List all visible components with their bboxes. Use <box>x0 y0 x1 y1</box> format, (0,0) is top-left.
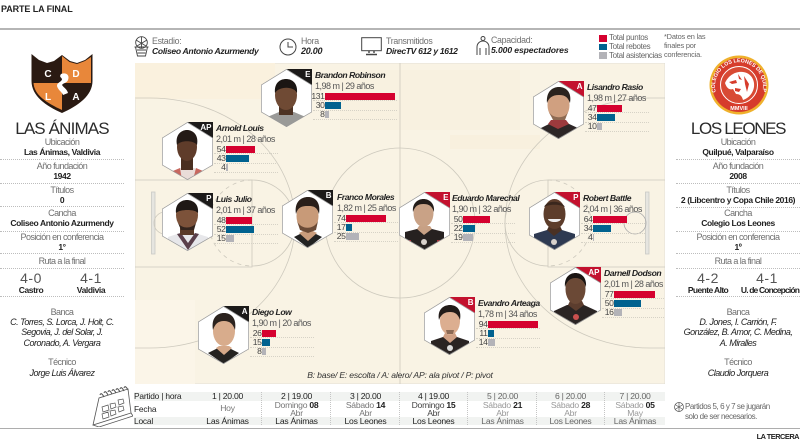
stats: 77 <box>605 288 614 298</box>
player: Eduardo Marechal: 1,90 m | 32 años <box>452 204 511 214</box>
icon: los leones crest: MMVIII <box>730 106 748 112</box>
stats: 22 <box>454 223 462 233</box>
icon: las animas shield <box>32 54 92 113</box>
note: data footnote <box>664 32 706 59</box>
playoff route: Puente Alto <box>688 285 728 295</box>
player: Lisandro Rasio: 1,98 m | 27 años <box>587 93 646 103</box>
portrait: B <box>468 298 474 307</box>
playoff route: U. de Concepción <box>741 285 799 295</box>
field: ubicacion: Las Ánimas, Valdivia <box>24 147 100 157</box>
field: titulos <box>0 185 124 207</box>
field: ubicacion: Ubicación <box>721 137 755 147</box>
note: games 5 6 7 <box>674 402 770 421</box>
stats: 15 <box>253 337 262 347</box>
stats: 25 <box>337 231 346 241</box>
stats <box>311 90 397 120</box>
stats <box>250 328 314 357</box>
stats <box>585 102 649 132</box>
schedule row labels: Fecha <box>134 404 156 414</box>
stats: 34 <box>584 223 592 233</box>
stats: 34 <box>588 112 596 122</box>
game 4 <box>400 392 468 425</box>
player: Franco Morales <box>282 190 398 248</box>
game 7 <box>614 391 656 426</box>
field: ruta a la final: Ruta a la final <box>39 256 85 266</box>
game 1 <box>194 392 262 425</box>
playoff route <box>676 270 800 297</box>
game 6: Los Leones <box>550 416 591 426</box>
game 3: 3 | 20.00 <box>350 391 381 401</box>
position key: B: base/ E: escolta / A: alero/ AP: ala pivot / P: pivot <box>307 370 493 380</box>
stats: 19 <box>454 232 462 242</box>
stats <box>334 212 398 242</box>
player: Lisandro Rasio <box>533 81 649 139</box>
player: Brandon Robinson <box>261 69 397 127</box>
field: tecnico: Claudio Jorquera <box>708 368 768 378</box>
stats <box>214 214 278 244</box>
field: banca: Banca <box>51 307 73 317</box>
field: ano fundacion: Año fundación <box>713 161 763 171</box>
info: capacidad: 5.000 espectadores <box>491 45 569 55</box>
player: Franco Morales: Franco Morales <box>337 192 394 202</box>
icon: las animas shield: C <box>44 69 52 80</box>
player: Eduardo Marechal <box>399 192 520 250</box>
player: Evandro Arteaga <box>424 297 540 355</box>
portrait: P <box>573 193 579 202</box>
note: games 5 6 7: solo de ser necesarios. <box>685 412 757 421</box>
stats: 52 <box>217 224 226 234</box>
player: Robert Battle <box>529 192 645 250</box>
field: cancha: Cancha <box>48 208 76 218</box>
game 3 <box>332 392 400 425</box>
stats: 30 <box>316 100 324 110</box>
player: Diego Low: 1,90 m | 20 años <box>252 318 311 328</box>
portrait: AP <box>200 123 212 132</box>
field: cancha: Coliseo Antonio Azurmendy <box>10 218 114 228</box>
stats: 15 <box>217 233 226 243</box>
playoff route: Castro <box>19 285 43 295</box>
field: ano fundacion: 1942 <box>53 171 71 181</box>
portrait <box>261 69 312 127</box>
panel: los leones team <box>676 56 800 378</box>
note: data footnote: finales por <box>664 41 696 50</box>
field: banca: Coronado, A. Vergara <box>24 338 100 348</box>
portrait: B <box>326 191 332 200</box>
info: transmitidos: DirecTV 612 y 1612 <box>386 46 458 56</box>
game 4: Abr <box>427 408 440 418</box>
stats: 4 <box>221 162 226 172</box>
playoff route: 4-2 <box>697 270 719 286</box>
portrait <box>399 192 450 250</box>
player: Robert Battle: Robert Battle <box>583 193 631 203</box>
icon: las animas shield: D <box>72 69 80 80</box>
field: tecnico <box>708 357 768 378</box>
game 2: Las Ánimas <box>275 416 318 426</box>
field: ubicacion <box>0 137 124 160</box>
portrait <box>424 297 475 355</box>
field: posicion: 1° <box>58 242 66 252</box>
stats: 48 <box>217 214 226 224</box>
game 1: Las Ánimas <box>206 416 249 426</box>
icon: los leones crest <box>710 56 768 114</box>
player: Diego Low <box>198 306 314 364</box>
stats: 16 <box>605 307 614 317</box>
legend: stat colours: Total puntos <box>609 33 648 42</box>
field: cancha: Colegio Los Leones <box>701 218 775 228</box>
info: capacidad <box>476 35 569 55</box>
stats: 50 <box>605 298 614 308</box>
player: Evandro Arteaga: 1,78 m | 34 años <box>478 309 537 319</box>
stats <box>602 288 664 318</box>
field: ruta a la final: Ruta a la final <box>715 256 761 266</box>
player: Franco Morales: 1,82 m | 25 años <box>337 203 396 213</box>
stats: 8 <box>257 346 262 356</box>
game 7: May <box>627 408 643 418</box>
player: Arnold Louis <box>162 122 278 180</box>
field: tecnico: Jorge Luis Álvarez <box>29 368 95 378</box>
stats: 64 <box>584 214 592 224</box>
game 6 <box>537 392 605 425</box>
portrait <box>282 190 333 248</box>
portrait: P <box>206 194 212 203</box>
field: banca: González, B. Amor, C. Medina, <box>684 327 792 337</box>
stats: 11 <box>479 328 488 338</box>
playoff route: 4-0 <box>20 270 42 286</box>
game 7: Las Ánimas <box>614 416 656 426</box>
team name: LOS LEONES <box>691 119 785 138</box>
icon: person <box>476 36 490 55</box>
icon: las animas shield: A <box>72 92 80 103</box>
stats <box>214 144 278 173</box>
field: ubicacion: Ubicación <box>45 137 79 147</box>
player: Darnell Dodson: 2,01 m | 28 años <box>604 279 663 289</box>
field: banca: Banca <box>727 307 749 317</box>
info: hora: 20.00 <box>301 46 322 56</box>
field: titulos: Títulos <box>726 185 750 195</box>
playoff route <box>0 270 124 297</box>
field: banca: Segovia, J. del Solar, J. <box>21 327 103 337</box>
game 7: 7 | 20.00 <box>619 391 651 401</box>
field: ruta a la final <box>676 256 800 269</box>
stats <box>581 214 645 243</box>
stats: 47 <box>588 102 596 112</box>
stats: 26 <box>253 328 262 338</box>
game 7: Sábado 05 <box>615 400 655 410</box>
field: posicion: 1º <box>734 242 742 252</box>
player: Eduardo Marechal: Eduardo Marechal <box>452 193 519 203</box>
stats: 8 <box>320 109 324 119</box>
game 4: Los Leones <box>413 416 454 426</box>
game 1: Hoy <box>220 403 235 413</box>
portrait <box>198 306 249 364</box>
stats: 54 <box>217 144 226 154</box>
game 5: Las Ánimas <box>481 416 524 426</box>
player: Brandon Robinson: Brandon Robinson <box>315 70 385 80</box>
portrait: A <box>577 82 583 91</box>
field: cancha <box>0 208 124 232</box>
player: Luis Julio: 2,01 m | 37 años <box>216 205 275 215</box>
stats: 74 <box>337 212 346 222</box>
game 4: 4 | 19.00 <box>418 391 449 401</box>
player: Diego Low: Diego Low <box>252 307 291 317</box>
portrait: AP <box>588 268 600 277</box>
field: titulos: 2 (Libcentro y Copa Chile 2016) <box>681 195 795 205</box>
field: tecnico <box>29 357 95 378</box>
field: posicion: Posición en conferencia <box>21 232 103 242</box>
game 5: 5 | 20.00 <box>487 391 518 401</box>
field: ubicacion: Quilpué, Valparaíso <box>702 147 774 157</box>
game 1: 1 | 20.00 <box>212 391 243 401</box>
player: Lisandro Rasio: Lisandro Rasio <box>587 82 643 92</box>
note: data footnote: conferencia. <box>664 50 702 59</box>
stats: 94 <box>479 318 488 328</box>
field: banca: D. Jones, I. Carrión, F. <box>699 317 777 327</box>
field: tecnico: Técnico <box>48 357 76 367</box>
portrait <box>533 81 584 139</box>
game 5 <box>469 392 537 425</box>
portrait <box>162 122 213 180</box>
icon: basketball hoop <box>134 36 148 56</box>
playoff route: 4-1 <box>80 270 102 286</box>
stats: 10 <box>588 121 596 131</box>
schedule row labels: Local <box>134 416 153 426</box>
game 2: Abr <box>290 408 303 418</box>
field: posicion <box>0 232 124 254</box>
field: cancha <box>676 208 800 232</box>
player: Evandro Arteaga: Evandro Arteaga <box>478 298 540 308</box>
playoff route: 4-1 <box>756 270 778 286</box>
field: posicion: Posición en conferencia <box>697 232 779 242</box>
player: Darnell Dodson: Darnell Dodson <box>604 268 661 278</box>
info: estadio: Estadio: <box>152 36 181 46</box>
player: Robert Battle: 2,04 m | 36 años <box>583 204 642 214</box>
game 6: Abr <box>564 408 577 418</box>
info: hora: Hora <box>301 36 319 46</box>
portrait: A <box>242 307 248 316</box>
icon: television <box>361 37 382 56</box>
field: ano fundacion <box>0 161 124 184</box>
player: Luis Julio <box>162 193 278 251</box>
panel: basketball court <box>135 63 665 384</box>
legend: stat colours: Total rebotes <box>609 42 650 51</box>
game 3: Los Leones <box>345 416 386 426</box>
field: ano fundacion <box>676 161 800 184</box>
game 6: 6 | 20.00 <box>555 391 586 401</box>
info: estadio <box>134 36 260 56</box>
playoff route: Valdivia <box>77 285 105 295</box>
stats: 131 <box>311 90 324 100</box>
game 2: 2 | 19.00 <box>281 391 312 401</box>
legend: stat colours <box>599 33 662 60</box>
schedule row labels <box>134 391 182 426</box>
portrait <box>550 267 601 325</box>
game 6: Sábado 28 <box>551 400 590 410</box>
stats <box>476 318 540 348</box>
game 4: Domingo 15 <box>412 400 455 410</box>
info: hora <box>280 36 322 56</box>
field: banca: C. Torres, S. Lorca, J. Holt, C. <box>10 317 114 327</box>
icon: calendar <box>92 386 133 427</box>
schedule row labels: Partido | hora <box>134 391 181 401</box>
field: ruta a la final <box>0 256 124 269</box>
panel: schedule table <box>134 391 665 426</box>
field: titulos: 0 <box>60 195 64 205</box>
field: titulos <box>676 185 800 208</box>
stats <box>451 214 515 243</box>
info: estadio: Coliseo Antonio Azurmendy <box>152 46 258 56</box>
portrait <box>529 192 580 250</box>
field: tecnico: Técnico <box>724 357 752 367</box>
game 3: Sábado 14 <box>346 400 385 410</box>
field: posicion <box>676 232 800 254</box>
panel: las animas team <box>0 54 124 378</box>
field: titulos: Títulos <box>50 185 74 195</box>
player: Brandon Robinson: 1,98 m | 29 años <box>315 81 374 91</box>
field: ubicacion <box>676 137 800 160</box>
game 3: Abr <box>359 408 372 418</box>
game 5: Abr <box>496 408 509 418</box>
info: capacidad: Capacidad: <box>491 35 533 45</box>
player: Darnell Dodson <box>550 267 664 325</box>
stats: 4 <box>588 232 592 242</box>
icon: clock <box>280 38 296 56</box>
player: Luis Julio: Luis Julio <box>216 194 252 204</box>
field: banca <box>684 307 792 348</box>
heading: parte la final: PARTE LA FINAL <box>1 4 73 14</box>
note: data footnote: *Datos en las <box>664 32 705 41</box>
field: banca: A. Miralles <box>720 338 756 348</box>
portrait <box>162 193 213 251</box>
credit: la tercera: LA TERCERA <box>757 432 799 441</box>
game 5: Sábado 21 <box>483 400 522 410</box>
game 2 <box>263 392 331 425</box>
portrait: E <box>305 70 311 79</box>
info: transmitidos <box>361 36 458 56</box>
icon: las animas shield: L <box>45 92 51 103</box>
field: ano fundacion: Año fundación <box>37 161 87 171</box>
stats: 17 <box>337 222 346 232</box>
stats: 43 <box>217 153 226 163</box>
info: transmitidos: Transmitidos <box>386 36 432 46</box>
icon: small basketball <box>674 402 684 412</box>
player: Arnold Louis: Arnold Louis <box>216 123 264 133</box>
portrait: E <box>443 193 449 202</box>
game 2: Domingo 08 <box>275 400 318 410</box>
note: games 5 6 7: Partidos 5, 6 y 7 se jugarán <box>685 402 770 411</box>
legend: stat colours: Total asistencias <box>609 51 662 60</box>
field: cancha: Cancha <box>724 208 752 218</box>
team name: LAS ÁNIMAS <box>15 119 109 138</box>
field: banca <box>10 307 114 348</box>
field: ano fundacion: 2008 <box>729 171 747 181</box>
player: Arnold Louis: 2,01 m | 28 años <box>216 134 275 144</box>
stats: 14 <box>479 337 488 347</box>
stats: 50 <box>454 214 462 224</box>
